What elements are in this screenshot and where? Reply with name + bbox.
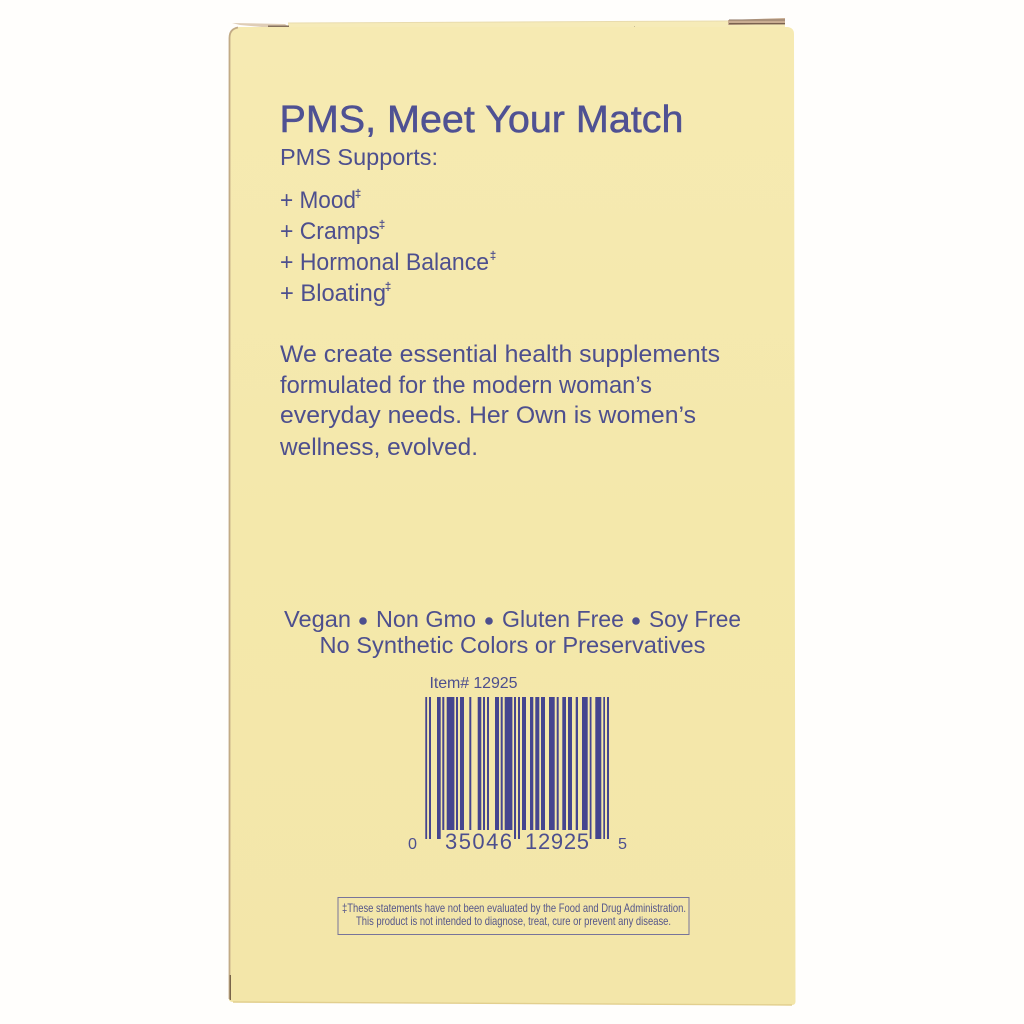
product attributes — [284, 606, 741, 658]
brand paragraph: We create essential health supplements — [280, 341, 720, 368]
barcode — [425, 697, 609, 839]
product attributes: Non Gmo — [376, 606, 476, 632]
benefits list: ‡ — [355, 188, 361, 200]
FDA disclaimer box: ‡These statements have not been evaluated by the Food and Drug Administration. — [342, 901, 686, 915]
product attributes: Soy Free — [649, 606, 741, 632]
brand paragraph: wellness, evolved. — [279, 434, 478, 461]
benefits list: + Hormonal Balance — [280, 249, 489, 276]
barcode digits: 0 — [408, 836, 417, 853]
benefits list — [280, 187, 496, 307]
product attributes: No Synthetic Colors or Preservatives — [320, 632, 706, 658]
brand paragraph: everyday needs. Her Own is women’s — [280, 402, 696, 429]
item number: Item# 12925 — [430, 675, 518, 692]
product attributes: Gluten Free — [502, 606, 624, 632]
barcode digits: 5 — [618, 836, 627, 853]
brand paragraph: formulated for the modern woman’s — [280, 372, 652, 399]
FDA disclaimer box — [338, 898, 689, 934]
brand paragraph — [279, 341, 720, 461]
box front panel — [229, 27, 796, 1005]
title: PMS, Meet Your Match — [280, 99, 684, 141]
benefits list: + Bloating — [280, 280, 386, 307]
barcode digits — [408, 829, 627, 854]
benefits list: + Cramps — [280, 218, 380, 245]
box top flap — [232, 18, 785, 33]
product attributes: Vegan — [284, 606, 351, 632]
subheading: PMS Supports: — [280, 144, 438, 170]
benefits list: + Mood — [280, 187, 356, 214]
barcode digits: 35046 — [445, 829, 512, 854]
benefits list: ‡ — [379, 219, 385, 231]
benefits list: ‡ — [385, 281, 391, 293]
barcode digits: 12925 — [525, 829, 589, 854]
benefits list: ‡ — [490, 250, 496, 262]
FDA disclaimer box: This product is not intended to diagnose, treat, cure or prevent any disease. — [356, 914, 671, 928]
